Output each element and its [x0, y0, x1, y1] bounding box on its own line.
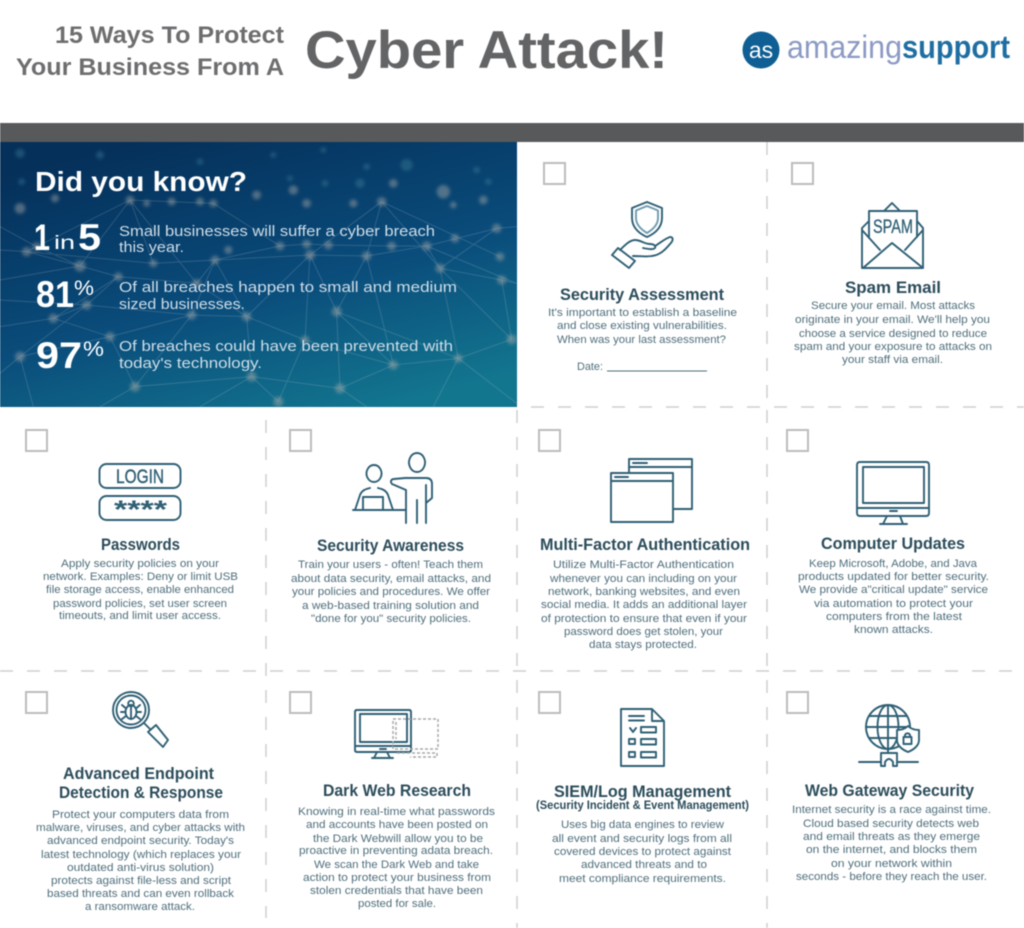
- checkbox: [787, 430, 808, 451]
- body text: Uses big data engines to review: [561, 819, 725, 831]
- body text: We scan the Dark Web and take: [314, 859, 479, 871]
- body text: [552, 819, 732, 885]
- icon: globe with shield and gateway: [859, 705, 919, 766]
- body text: and email threats as they emerge: [803, 831, 980, 843]
- body text: Train your users - often! Teach them: [298, 559, 483, 571]
- icon: spam envelope: [862, 203, 923, 268]
- body text: stolen credentials that have been: [310, 885, 483, 897]
- body text: malware, viruses, and cyber attacks with: [36, 822, 245, 834]
- stat: 1 in 5: [34, 217, 101, 258]
- subtitle line 2: Your Business From A: [16, 54, 284, 81]
- stat text 2: sized businesses.: [119, 296, 245, 313]
- panel: siem log management: [536, 692, 749, 885]
- body text: We provide a"critical update" service: [799, 584, 988, 596]
- body text: It's important to establish a baseline: [548, 307, 737, 319]
- body text: a web-based training solution and: [302, 600, 479, 612]
- stat: 97%: 97: [36, 335, 82, 376]
- logo: amazing support: amazing: [787, 29, 902, 65]
- body text: proactive in preventing adata breach.: [299, 845, 493, 857]
- checkbox: [792, 163, 813, 184]
- panel: advanced endpoint detection and response: [26, 692, 245, 913]
- body text: latest technology (which replaces your: [41, 849, 241, 861]
- icon: desktop monitor: [857, 462, 929, 524]
- body text: [798, 558, 989, 636]
- body text: your staff via email.: [842, 354, 943, 366]
- panel: web gateway security: [787, 692, 991, 883]
- checkbox: [290, 692, 311, 713]
- body text: based threats and can even rollback: [47, 888, 234, 900]
- heading: Detection & Response: [59, 784, 223, 802]
- body text: [298, 806, 495, 910]
- body text: and close existing vulnerabilities.: [557, 320, 727, 332]
- body text: via automation to protect your: [814, 598, 973, 610]
- network background: [0, 147, 517, 407]
- checkbox: [26, 430, 47, 451]
- stat text 2: Of all breaches happen to small and medium: [119, 279, 457, 296]
- body text: Utilize Multi-Factor Authentication: [553, 559, 734, 571]
- body text: of protection to ensure that even if your: [541, 613, 747, 625]
- icon: login fields: LOGIN: [116, 467, 164, 488]
- logo: amazing support: [742, 29, 1010, 68]
- stat: 97%: [36, 335, 104, 376]
- heading: Multi-Factor Authentication: [540, 536, 750, 554]
- heading: Security Awareness: [317, 537, 464, 555]
- checkbox: [26, 692, 47, 713]
- stat: 1 in 5: 5: [78, 217, 101, 258]
- heading: (Security Incident & Event Management): [536, 800, 749, 812]
- stat: 1 in 5: 1: [34, 217, 50, 258]
- body text: [43, 558, 238, 622]
- body text: about data security, email attacks, and: [291, 573, 491, 585]
- dark header bar: [0, 123, 1024, 142]
- main title: Cyber Attack!: [305, 21, 668, 80]
- body text: posted for sale.: [358, 898, 436, 910]
- body text: computers from the latest: [826, 611, 963, 623]
- body text: "done for you" security policies.: [311, 613, 471, 625]
- heading: [59, 765, 223, 802]
- body text: meet compliance requirements.: [559, 873, 726, 885]
- body text: Cloud based security detects web: [803, 818, 979, 830]
- body text: all event and security logs from all: [552, 833, 732, 845]
- body text: the Dark Webwill allow you to be: [313, 833, 483, 845]
- checkbox: [539, 692, 560, 713]
- heading: Spam Email: [845, 279, 941, 297]
- body text: Date:: [577, 361, 603, 373]
- icon: shield in hand: [612, 202, 673, 268]
- body text: products updated for better security.: [798, 571, 989, 583]
- panel: security awareness: [290, 430, 491, 625]
- header: title: [16, 21, 668, 81]
- body text: [541, 559, 747, 651]
- heading: Web Gateway Security: [805, 782, 975, 800]
- body text: data stays protected.: [589, 639, 697, 651]
- stat text 1: Small businesses will suffer a cyber breach: [119, 223, 435, 240]
- body text: outdated anti-virus solution): [67, 862, 214, 874]
- body text: spam and your exposure to attacks on: [794, 341, 992, 353]
- heading: SIEM/Log Management: [554, 783, 731, 801]
- checkbox: [290, 430, 311, 451]
- panel: passwords: [26, 430, 238, 622]
- icon: login fields: [100, 464, 180, 524]
- panel: did you know: [0, 142, 517, 407]
- body text: When was your last assessment?: [557, 334, 726, 346]
- stat: 81%: %: [74, 277, 94, 300]
- body text: originate in your email. We'll help you: [795, 314, 990, 326]
- body text: Keep Microsoft, Adobe, and Java: [809, 558, 978, 570]
- body text: on the internet, and blocks them: [806, 844, 977, 856]
- subtitle line 1: 15 Ways To Protect: [55, 22, 284, 49]
- icon: spam envelope: SPAM: [873, 217, 913, 238]
- body text: and accounts have been posted on: [306, 819, 488, 831]
- body text: Apply security policies on your: [61, 558, 219, 570]
- checkbox: [787, 692, 808, 713]
- icon: trainer and user: [353, 453, 432, 523]
- body text: action to protect your business from: [303, 872, 491, 884]
- logo: amazing support: as: [749, 37, 773, 63]
- icon: magnifier with bug: [113, 692, 168, 747]
- stat text 3: today's technology.: [119, 355, 262, 372]
- stat: 1 in 5: in: [54, 233, 75, 254]
- heading: Computer Updates: [821, 535, 965, 553]
- icon: login fields: ****: [114, 496, 167, 524]
- body text: choose a service designed to reduce: [799, 328, 987, 340]
- body text: known attacks.: [854, 624, 933, 636]
- body text: advanced endpoint security. Today's: [47, 835, 234, 847]
- body text: network. Examples: Deny or limit USB: [43, 571, 238, 583]
- panel: spam email: [792, 163, 992, 366]
- body text: Protect your computers data from: [52, 809, 229, 821]
- body text: social media. It adds an additional layer: [541, 599, 747, 611]
- panel: security assessment: [544, 163, 737, 373]
- body text: [548, 307, 737, 373]
- body text: Secure your email. Most attacks: [811, 300, 975, 312]
- stat text 1: this year.: [119, 239, 184, 256]
- body text: [36, 809, 245, 913]
- panel heading: Did you know?: [35, 166, 247, 197]
- heading: Security Assessment: [560, 286, 724, 304]
- heading: Passwords: [101, 536, 180, 554]
- stat text 3: Of breaches could have been prevented with: [119, 338, 453, 355]
- body text: on your network within: [831, 858, 952, 870]
- body text: password policies, set user screen: [53, 598, 227, 610]
- icon: browser windows: [611, 459, 692, 522]
- body text: seconds - before they reach the user.: [796, 871, 987, 883]
- body text: advanced threats and to: [581, 859, 707, 871]
- heading: Advanced Endpoint: [63, 765, 214, 783]
- panel: multi-factor authentication: [539, 430, 750, 651]
- body text: Internet security is a race against time.: [792, 804, 991, 816]
- heading: [536, 783, 749, 812]
- body text: whenever you can including on your: [549, 573, 737, 585]
- logo: amazing support: support: [902, 29, 1010, 65]
- body text: [794, 300, 992, 366]
- icon: checklist document: [621, 709, 664, 766]
- body text: [792, 804, 991, 883]
- body text: protects against file-less and script: [51, 875, 232, 887]
- body text: [291, 559, 491, 625]
- stat text 1: [119, 223, 435, 256]
- checkbox: [539, 430, 560, 451]
- body text: password does get stolen, your: [564, 626, 723, 638]
- body text: timeouts, and limit user access.: [59, 610, 221, 622]
- checkbox: [544, 163, 565, 184]
- body text: network, banking websites, and even: [548, 586, 740, 598]
- stat text 3: [119, 338, 453, 372]
- stat text 2: [119, 279, 457, 313]
- stat: 97%: %: [83, 338, 104, 361]
- body text: Knowing in real-time what passwords: [298, 806, 495, 818]
- body text: file storage access, enable enhanced: [46, 584, 234, 596]
- body text: your policies and procedures. We offer: [292, 586, 490, 598]
- panel: computer updates: [787, 430, 989, 636]
- body text: a ransomware attack.: [85, 901, 195, 913]
- heading: Dark Web Research: [323, 782, 471, 800]
- body text: covered devices to protect against: [554, 846, 732, 858]
- stat: 81%: 81: [36, 274, 74, 315]
- panel: dark web research: [290, 692, 495, 910]
- icon: monitor with hidden screen: [355, 710, 438, 758]
